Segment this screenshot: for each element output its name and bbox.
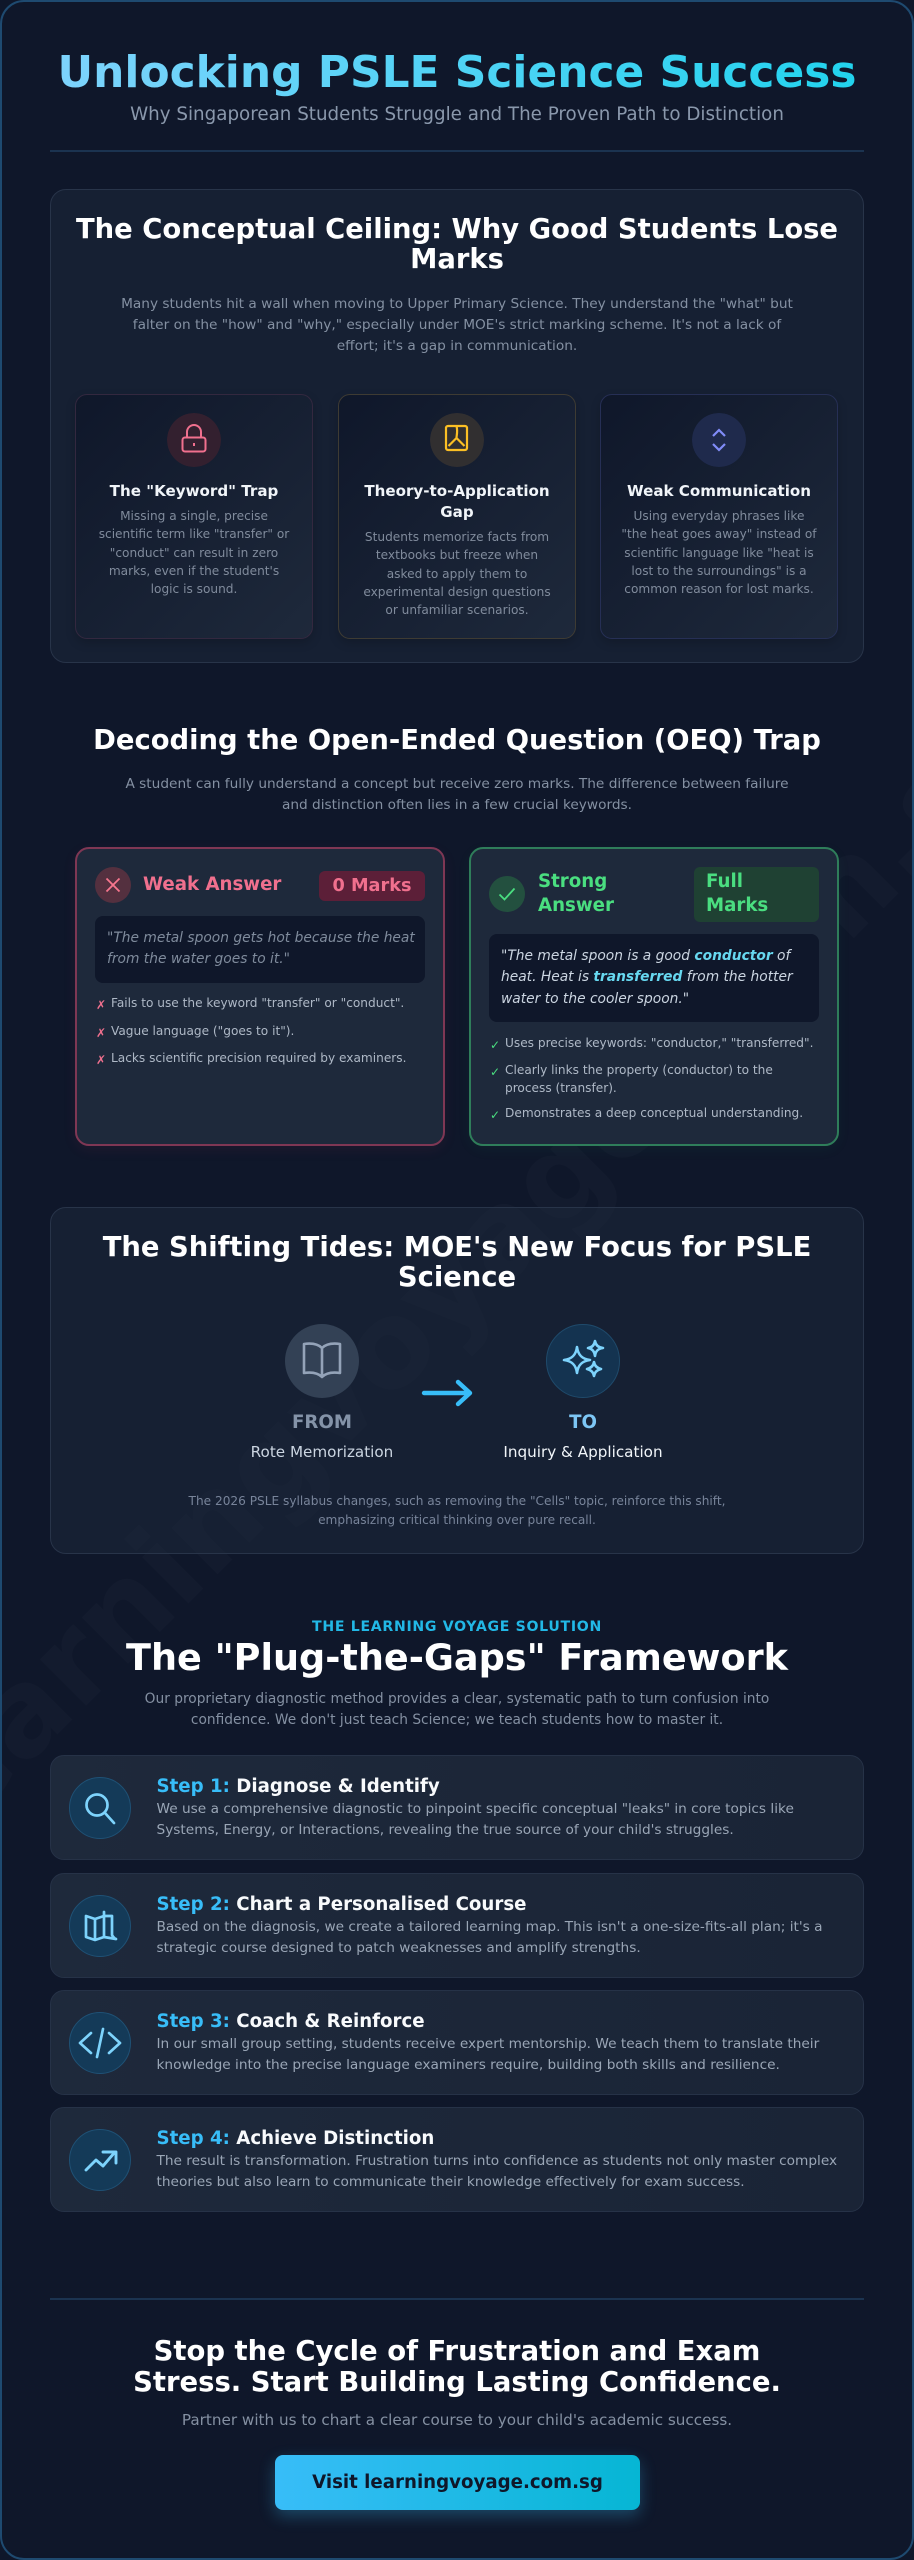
step text	[156, 1919, 823, 1956]
framework intro	[145, 1690, 769, 1728]
list: weak points: ✗	[96, 1026, 106, 1040]
from label: FROM	[292, 1412, 352, 1433]
step title: Step 1: Diagnose & Identify	[156, 1776, 440, 1797]
quote: strong: water to the cooler spoon."	[501, 991, 689, 1007]
icon: check	[489, 876, 525, 912]
heading: OEQ: Decoding the Open-Ended Question (OEQ) Trap	[93, 725, 821, 756]
card text: "conduct" can result in zero	[110, 546, 278, 560]
card text	[363, 530, 551, 617]
strong answer label: Answer	[538, 895, 614, 916]
card text: textbooks but freeze when	[376, 548, 538, 562]
list: weak points: Vague language ("goes to it").	[111, 1024, 294, 1038]
list: strong points: ✓	[490, 1108, 500, 1122]
quote: strong: "The metal spoon is a good conductor of	[501, 948, 790, 964]
badge: full marks: Marks	[706, 895, 768, 916]
OEQ intro text: A student can fully understand a concept but receive zero marks. The difference between failure	[125, 776, 789, 792]
icon: open book	[285, 1324, 359, 1398]
OEQ intro text: and distinction often lies in a few crucial keywords.	[282, 797, 632, 813]
step text: The result is transformation. Frustration turns into confidence as students not only master complex	[156, 2153, 837, 2169]
card text: marks, even if the student's	[109, 564, 279, 578]
heading: conceptual ceiling: Marks	[410, 244, 504, 275]
card title	[364, 482, 550, 521]
CTA button: Visit learningvoyage.com.sg	[312, 2472, 603, 2493]
heading: conceptual ceiling	[76, 214, 838, 275]
title: Unlocking PSLE Science Success	[58, 47, 856, 98]
step title: Step 4: Achieve Distinction	[156, 2128, 434, 2149]
step text: strategic course designed to patch weaknesses and amplify strengths.	[156, 1940, 641, 1956]
icon: cross	[95, 867, 131, 903]
quote: weak	[95, 916, 425, 983]
step text	[156, 2036, 820, 2073]
card text: common reason for lost marks.	[624, 582, 814, 596]
card title: Theory-to-Application	[364, 482, 550, 500]
icon: lock	[167, 413, 221, 467]
step text	[156, 1801, 794, 1838]
quote: strong	[489, 934, 819, 1022]
card text: lost to the surroundings" is a	[631, 564, 807, 578]
card text: logic is sound.	[151, 582, 237, 596]
heading: conceptual ceiling: The Conceptual Ceiling: Why Good Students Lose	[76, 214, 838, 245]
framework intro: confidence. We don't just teach Science; we teach students how to master it.	[191, 1712, 723, 1728]
list: weak points	[96, 996, 406, 1067]
CTA heading	[133, 2336, 781, 2398]
CTA text: Partner with us to chart a clear course to your child's academic success.	[182, 2411, 732, 2429]
step text: Systems, Energy, or Interactions, revealing the true source of your child's struggles.	[156, 1822, 734, 1838]
heading: shifting tides: Science	[398, 1262, 516, 1293]
badge: 0 marks: 0 Marks	[332, 876, 412, 896]
to text: Inquiry & Application	[503, 1443, 663, 1461]
heading: shifting tides: The Shifting Tides: MOE's New Focus for PSLE	[103, 1232, 811, 1263]
step text: Based on the diagnosis, we create a tailored learning map. This isn't a one-size-fits-all plan; it's a	[156, 1919, 823, 1935]
badge: full marks: Full	[706, 871, 743, 892]
framework heading: The "Plug-the-Gaps" Framework	[126, 1636, 788, 1679]
list: weak points: ✗	[96, 1053, 106, 1067]
icon: code	[69, 2012, 131, 2074]
eyebrow label: THE LEARNING VOYAGE SOLUTION	[312, 1618, 602, 1634]
CTA button	[275, 2455, 640, 2510]
quote: weak: "The metal spoon gets hot because the heat	[107, 930, 415, 946]
badge: full marks	[694, 867, 819, 922]
card text: Using everyday phrases like	[634, 509, 804, 523]
framework intro: Our proprietary diagnostic method provides a clear, systematic path to turn confusion into	[145, 1690, 769, 1706]
icon: chevrons	[692, 413, 746, 467]
card text: Students memorize facts from	[365, 530, 549, 544]
card text: experimental design questions	[363, 585, 551, 599]
icon: magnifier	[69, 1777, 131, 1839]
card: keyword trap	[75, 394, 313, 639]
from text: Rote Memorization	[251, 1443, 393, 1461]
card text: asked to apply them to	[387, 567, 527, 581]
badge: 0 marks	[319, 871, 425, 901]
step 4	[50, 2107, 864, 2212]
icon: map	[69, 1895, 131, 1957]
card text: or unfamiliar scenarios.	[385, 603, 529, 617]
step text: In our small group setting, students receive expert mentorship. We teach them to translate their	[156, 2036, 819, 2052]
to label: TO	[569, 1412, 597, 1433]
card text	[621, 509, 817, 596]
panel: shifting tides	[50, 1207, 864, 1554]
subtitle: Why Singaporean Students Struggle and The Proven Path to Distinction	[130, 104, 784, 124]
card: theory gap	[338, 394, 576, 639]
intro text: Many students hit a wall when moving to Upper Primary Science. They understand the "what" but	[121, 296, 793, 312]
quote: weak: from the water goes to it."	[107, 951, 290, 967]
icon: book	[430, 413, 484, 467]
icon: sparkles	[546, 1324, 620, 1398]
quote: strong: heat. Heat is transferred from the hotter	[501, 969, 793, 985]
step title: Step 2: Chart a Personalised Course	[156, 1894, 526, 1915]
list: weak points: Lacks scientific precision required by examiners.	[111, 1051, 406, 1065]
syllabus note	[188, 1494, 725, 1526]
CTA heading: Stress. Start Building Lasting Confidence.	[133, 2367, 781, 2398]
card title: The "Keyword" Trap	[110, 482, 278, 500]
list: weak points: Fails to use the keyword "transfer" or "conduct".	[111, 996, 404, 1010]
list: strong points: Uses precise keywords: "conductor," "transferred".	[505, 1036, 813, 1050]
icon: trend up	[69, 2129, 131, 2191]
card text: scientific language like "heat is	[624, 546, 814, 560]
step text: We use a comprehensive diagnostic to pinpoint specific conceptual "leaks" in core topics like	[156, 1801, 794, 1817]
card text	[99, 509, 290, 596]
list: strong points	[490, 1036, 813, 1122]
panel: weak answer	[75, 847, 445, 1146]
card title: Weak Communication	[627, 482, 811, 500]
card text: scientific term like "transfer" or	[99, 527, 289, 541]
list: strong points: Clearly links the property (conductor) to the	[505, 1063, 773, 1077]
weak answer label: Weak Answer	[143, 874, 281, 895]
OEQ intro text	[125, 776, 789, 813]
intro text: effort; it's a gap in communication.	[337, 338, 577, 354]
CTA heading: Stop the Cycle of Frustration and Exam	[154, 2336, 760, 2367]
strong answer label	[538, 871, 614, 916]
syllabus note: emphasizing critical thinking over pure recall.	[318, 1512, 596, 1526]
step text: knowledge into the precise language examiners require, building both skills and resilience.	[156, 2057, 780, 2073]
intro text	[121, 296, 793, 354]
list: strong points: ✓	[490, 1065, 500, 1079]
panel: conceptual ceiling	[50, 189, 864, 663]
heading: shifting tides	[102, 1232, 811, 1293]
step 3	[50, 1990, 864, 2095]
arrow	[422, 1380, 472, 1406]
panel: strong answer	[469, 847, 839, 1146]
intro text: falter on the "how" and "why," especially under MOE's strict marking scheme. It's not a lack of	[133, 317, 781, 333]
card title: Gap	[440, 503, 474, 521]
card text: Missing a single, precise	[120, 509, 268, 523]
list: weak points: ✗	[96, 998, 106, 1012]
list: strong points: process (transfer).	[505, 1081, 617, 1095]
step 1	[50, 1755, 864, 1860]
list: strong points: ✓	[490, 1038, 500, 1052]
step text	[156, 2153, 837, 2190]
card: weak communication	[600, 394, 838, 639]
step title: Step 3: Coach & Reinforce	[156, 2011, 425, 2032]
card text: "the heat goes away" instead of	[621, 527, 817, 541]
syllabus note: The 2026 PSLE syllabus changes, such as removing the "Cells" topic, reinforce this shift,	[189, 1494, 725, 1508]
strong answer label: Strong	[538, 871, 607, 892]
step 2	[50, 1873, 864, 1978]
list: strong points: Demonstrates a deep conceptual understanding.	[505, 1106, 803, 1120]
step text: theories but also learn to communicate their knowledge effectively for exam success.	[156, 2174, 745, 2190]
